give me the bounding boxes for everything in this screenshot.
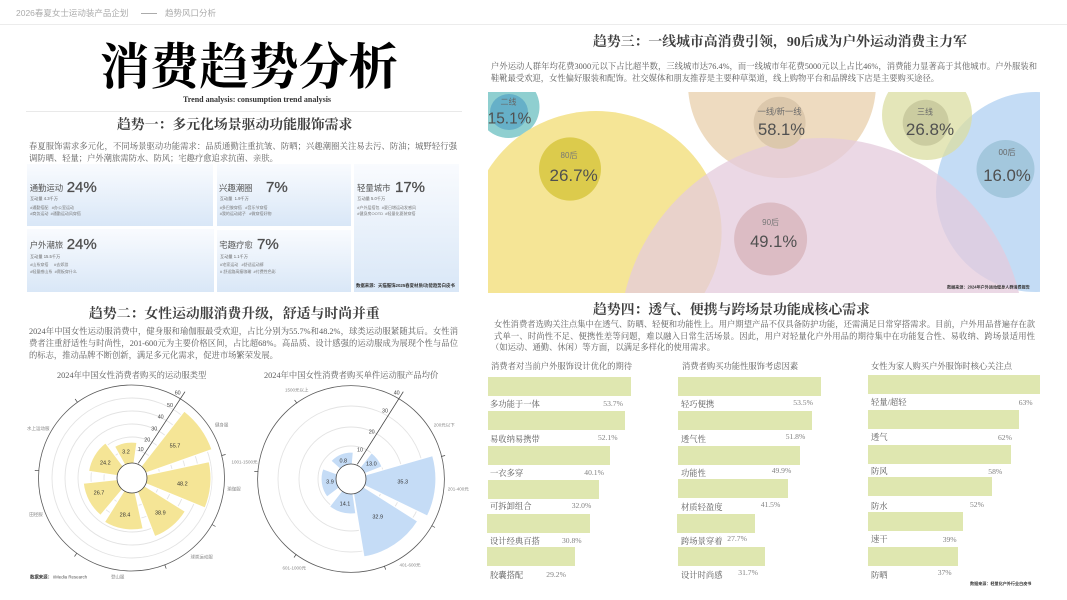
chart: polar price bands: 1500元以上: [285, 387, 309, 394]
bubble: post 80s outer: [470, 111, 722, 353]
bar chart: purchase factors: 材质轻盈度: [681, 503, 722, 512]
chart: polar clothing types: 60: [175, 390, 181, 396]
bar chart: core concerns for family: 52%: [970, 500, 984, 509]
bar chart: purchase factors: 透气性: [681, 435, 706, 444]
card: interest circles: #多巴胺穿搭 #音乐节穿搭: [220, 205, 267, 210]
bubble: third tier core: 26.8%: [906, 120, 954, 139]
bubble: post 90s core: 90后: [762, 217, 779, 227]
card: outdoor travel: #轻量感山系 #爬板穿什么: [30, 269, 77, 274]
card: commute sports: 通勤运动: [30, 183, 63, 193]
card: home healing: # 舒适路高瘦咖瑜 #付费性色彩: [220, 269, 276, 274]
chart: polar price bands: 20: [369, 430, 375, 436]
bubble: tier one outer: [688, 0, 876, 178]
bar chart: purchase factors: 跨场景穿着: [681, 537, 722, 546]
bar chart: purchase factors: 51.8%: [786, 432, 805, 441]
heading: trend two: 趋势二：女性运动服消费升级，舒适与时尚并重: [89, 306, 380, 321]
panel: trend two: [27, 306, 469, 581]
card: interest circles: #我的运动裙子 #微穿搭好物: [220, 211, 271, 216]
chart: polar clothing types: 数据来源： iiMedia Research: [30, 574, 88, 581]
chart: polar clothing types: 24.2: [100, 460, 111, 466]
card: home healing: 7%: [257, 236, 279, 253]
card: outdoor travel: 24%: [67, 236, 97, 253]
card: light city: #户外层搭包 #夏日增运动发感风: [357, 205, 416, 210]
chart: polar price bands: 14.1: [340, 501, 350, 507]
bar chart: design optimisation: 32.0%: [572, 501, 591, 510]
bar chart: core concerns for family: [868, 362, 1040, 586]
chart: polar price bands: 3.9: [326, 480, 334, 486]
chart: polar clothing types: 水上运动服: [27, 425, 50, 432]
panel: trend four: [487, 302, 1040, 586]
chart: polar clothing types: 3.2: [122, 449, 130, 455]
chart: polar clothing types: 38.9: [155, 510, 166, 516]
bar chart: design optimisation: 易收纳易携带: [490, 435, 540, 444]
bar chart: design optimisation: 胶囊搭配: [490, 571, 523, 580]
bubble: post 80s core: 80后: [561, 150, 577, 160]
bar chart: purchase factors: 53.5%: [793, 398, 813, 407]
bar chart: purchase factors: 功能性: [681, 469, 706, 478]
chart: polar clothing types: [27, 384, 241, 581]
chart: polar clothing types: 瑜伽服: [227, 486, 241, 493]
text: trend four description: [491, 320, 1035, 352]
panel: trend one: [27, 117, 459, 292]
card: outdoor travel: #山系穿搭 #去郊游: [30, 262, 68, 267]
card: outdoor travel: 互动量 15.5千万: [30, 254, 60, 259]
card: commute sports: #商务运动 #通勤运动风穿搭: [30, 211, 81, 216]
chart: polar price bands: [231, 385, 469, 573]
header bar: 趋势风口分析: [165, 8, 216, 18]
bar chart: core concerns for family: 速干: [871, 535, 888, 544]
text: trend three description: [491, 62, 1037, 83]
text: trend two description: [29, 326, 458, 360]
bar chart: design optimisation: 52.1%: [598, 433, 618, 442]
bar chart: core concerns for family: 数据来源：轻量化户外行业白皮书: [970, 581, 1031, 586]
bar chart: core concerns for family: 58%: [988, 467, 1002, 476]
chart: polar price bands: 13.0: [366, 462, 377, 468]
heading: chart one title: 2024年中国女性消费者购买的运动服类型: [57, 371, 206, 380]
chart: polar price bands: 0.8: [339, 458, 347, 464]
card: light city: 数据来源：天猫服饰2025春夏材质/功能趋势白皮书: [356, 283, 455, 288]
bar chart: purchase factors: [677, 362, 821, 580]
chart: polar clothing types: 10: [138, 447, 144, 453]
chart: polar clothing types: 55.7: [170, 444, 180, 450]
chart: polar price bands: 10: [357, 447, 363, 453]
bubble: tier one core: [754, 97, 806, 149]
card: commute sports: #通勤搭配 #办公室运动: [30, 205, 74, 210]
bubble: post 80s core: 26.7%: [549, 166, 598, 185]
text: trend four description: 式单一、时尚性不足、便携性差等问题，难以融入日常生活场景。因此，用户对轻量化户外用品的期待集中在功能复合性、易收纳、跨场景适用性: [494, 332, 1035, 341]
bar chart: core concerns for family: 63%: [1019, 398, 1033, 407]
card: light city: [354, 164, 459, 292]
bar chart: purchase factors: 轻巧便携: [681, 400, 714, 409]
card: home healing: #宅家运动 #舒适运动裤: [220, 262, 264, 267]
chart: polar price bands: 1001-1500元: [231, 460, 258, 466]
chart: polar clothing types: 26.7: [94, 490, 104, 496]
chart: polar price bands: 32.9: [372, 514, 383, 520]
chart: polar clothing types: 40: [158, 415, 164, 421]
text: trend one description: 春夏服饰需求多元化，不同场景驱动功能需求：品质通勤注重抗皱、防晒；兴趣潮圈关注易去污、防油；城野轻行强: [29, 142, 457, 150]
text: trend two description: 2024年中国女性运动服消费中，健身服和瑜伽服最受欢迎，占比分别为55.7%和48.2%，球类运动服紧随其后。女性消: [29, 327, 458, 336]
header bar: [0, 0, 1067, 25]
chart: polar price bands: 40: [394, 391, 400, 397]
heading: trend four: 趋势四：透气、便携与跨场景功能成核心需求: [593, 302, 870, 317]
bubble: post 90s core: [734, 202, 807, 276]
bubble: third tier outer: [882, 70, 972, 160]
chart: polar clothing types: 田径服: [29, 511, 43, 518]
label: second tier values: 二线: [500, 97, 516, 107]
bubble: tier one core: 58.1%: [758, 120, 805, 139]
bar chart: core concerns for family: 女性为家人购买户外服饰时核心关注点: [871, 362, 1012, 371]
bar chart: core concerns for family: 防风: [871, 467, 888, 476]
text: trend one description: 调防晒、轻量；户外潮旅需防水、防风；宅趣疗愈追求抗菌、亲肤。: [29, 154, 278, 162]
card: commute sports: 互动量 4.3千万: [30, 196, 58, 201]
bar chart: core concerns for family: 62%: [998, 433, 1012, 442]
text: trend four description: 女性消费者选购关注点集中在透气、防晒、轻便和功能性上。用户期望产品不仅具备防护功能，还需满足日常穿搭需求。目前，户外用品普遍存在款: [494, 320, 1035, 329]
chart: polar clothing types: 球类运动服: [190, 553, 213, 560]
chart: polar clothing types: 登山服: [111, 573, 125, 580]
bubble: third tier core: 三线: [917, 107, 933, 117]
bar chart: purchase factors: 49.9%: [772, 466, 791, 475]
bar chart: core concerns for family: 防水: [871, 502, 888, 511]
panel: trend three: [488, 34, 1040, 293]
header bar: 2026春夏女士运动装产品企划: [16, 8, 128, 18]
label: second tier values: 15.1%: [488, 110, 532, 128]
bar chart: purchase factors: 消费者购买功能性服饰考虑因素: [682, 362, 798, 371]
chart: polar clothing types: 28.4: [120, 512, 130, 518]
bar chart: core concerns for family: 39%: [943, 535, 957, 544]
card: interest circles: 互动量 1.9千万: [220, 196, 249, 201]
bar chart: design optimisation: 40.1%: [584, 468, 604, 477]
card: light city: #健身房OOTD #轻量化夏装穿搭: [357, 211, 416, 216]
data source: 数据来源：2024年户外运动健身人群消费报告: [947, 284, 1030, 290]
heading: trend three: 趋势三：一线城市高消费引领，90后成为户外运动消费主力军: [593, 34, 967, 49]
chart: polar price bands: 35.3: [397, 480, 408, 486]
card: home healing: 宅趣疗愈: [219, 240, 253, 250]
card: commute sports: [27, 164, 213, 226]
text: trend two description: 的标志，推动品牌不断创新，满足多元化需求，促进市场繁荣发展。: [29, 351, 278, 360]
bar chart: design optimisation: [487, 362, 632, 580]
text: trend two description: 费者注重舒适性与时尚性，201-600元为主要价格区间，占比超68%。高品质、设计感强的运动服成为展现个性与品位: [29, 339, 458, 348]
english subtitle: Trend analysis: consumption trend analysis: [183, 95, 331, 104]
card: interest circles: 兴趣潮圈: [219, 183, 252, 193]
bubble: post 90s outer: [619, 138, 1025, 543]
bubble: post 00s outer: [936, 92, 1067, 292]
card: light city: 17%: [395, 179, 425, 196]
card: light city: 互动量 5.0千万: [357, 196, 385, 201]
bubble: post 00s core: [976, 140, 1034, 198]
bar chart: design optimisation: 29.2%: [546, 570, 566, 579]
bar chart: purchase factors: 41.5%: [761, 500, 780, 509]
bubble: post 90s core: 49.1%: [750, 232, 797, 251]
bar chart: purchase factors: 设计时尚感: [681, 571, 722, 580]
card: interest circles: 7%: [266, 179, 288, 196]
text: trend one description: [29, 142, 457, 162]
chart: polar clothing types: 30: [151, 426, 157, 432]
bar chart: core concerns for family: 透气: [871, 433, 888, 442]
title block: [26, 38, 462, 112]
bar chart: design optimisation: 消费者对当前户外服饰设计优化的期待: [491, 362, 632, 371]
card: outdoor travel: 户外潮旅: [30, 240, 63, 250]
bar chart: core concerns for family: 37%: [938, 568, 952, 577]
card: commute sports: 24%: [67, 179, 97, 196]
bubble: tier one core: 一线/新一线: [757, 107, 802, 117]
card: home healing: [217, 230, 351, 292]
chart: polar price bands: 200元以下: [434, 423, 455, 429]
text: trend three description: 鞋靴最受欢迎，女性偏好服装和配饰。社交媒体和朋友推荐是主要种草渠道，线上购物平台和品牌线下店是主要购买途径。: [491, 74, 939, 83]
heading: trend one: 趋势一：多元化场景驱动功能服饰需求: [117, 117, 352, 132]
bar chart: design optimisation: 53.7%: [603, 399, 623, 408]
bar chart: design optimisation: 设计经典百搭: [490, 537, 540, 546]
bar chart: core concerns for family: 防晒: [871, 571, 888, 580]
bubble: second tier cities: [478, 76, 540, 138]
main title: 消费趋势分析: [100, 40, 398, 95]
bar chart: design optimisation: 多功能于一体: [490, 400, 540, 409]
chart: polar price bands: 401-600元: [399, 563, 421, 569]
heading: chart two title: 2024年中国女性消费者购买单件运动服产品均价: [264, 371, 438, 380]
chart: polar clothing types: 50: [167, 403, 173, 409]
bar chart: core concerns for family: 轻量/超轻: [871, 398, 906, 407]
bar chart: purchase factors: 31.7%: [738, 568, 758, 577]
chart: polar price bands: 601-1000元: [283, 565, 307, 571]
card: interest circles: [217, 164, 351, 226]
bubble: post 00s core: 16.0%: [983, 166, 1031, 185]
bubble: third tier core: [903, 100, 954, 146]
card: light city: 轻量城市: [357, 183, 390, 193]
chart: polar price bands: 201-400元: [448, 487, 469, 493]
chart: polar clothing types: 健身服: [215, 422, 229, 429]
chart: polar clothing types: 48.2: [177, 482, 188, 488]
card: home healing: 互动量 1.1千万: [220, 254, 248, 259]
text: trend three description: 户外运动人群年均花费3000元以下占比超半数，三线城市达76.4%，而一线城市年花费5000元以上占比46%，消费能力显著高于其他城市。户外服装和: [491, 62, 1037, 70]
chart: bubble overlap: [488, 92, 1040, 293]
bubble: post 80s core: [539, 137, 601, 201]
chart: polar price bands: 30: [382, 409, 388, 415]
label: second tier values: [488, 97, 532, 128]
chart: polar clothing types: 20: [144, 437, 150, 443]
text: trend four description: （如运动、通勤、休闲）等方面，以满足多样化的使用需求。: [491, 343, 715, 352]
bar chart: design optimisation: 一衣多穿: [490, 469, 523, 478]
bar chart: purchase factors: 27.7%: [727, 534, 747, 543]
card: outdoor travel: [27, 229, 214, 292]
bar chart: design optimisation: 可拆卸组合: [490, 502, 532, 511]
bubble: post 00s core: 00后: [999, 147, 1015, 157]
bar chart: design optimisation: 30.8%: [562, 536, 582, 545]
